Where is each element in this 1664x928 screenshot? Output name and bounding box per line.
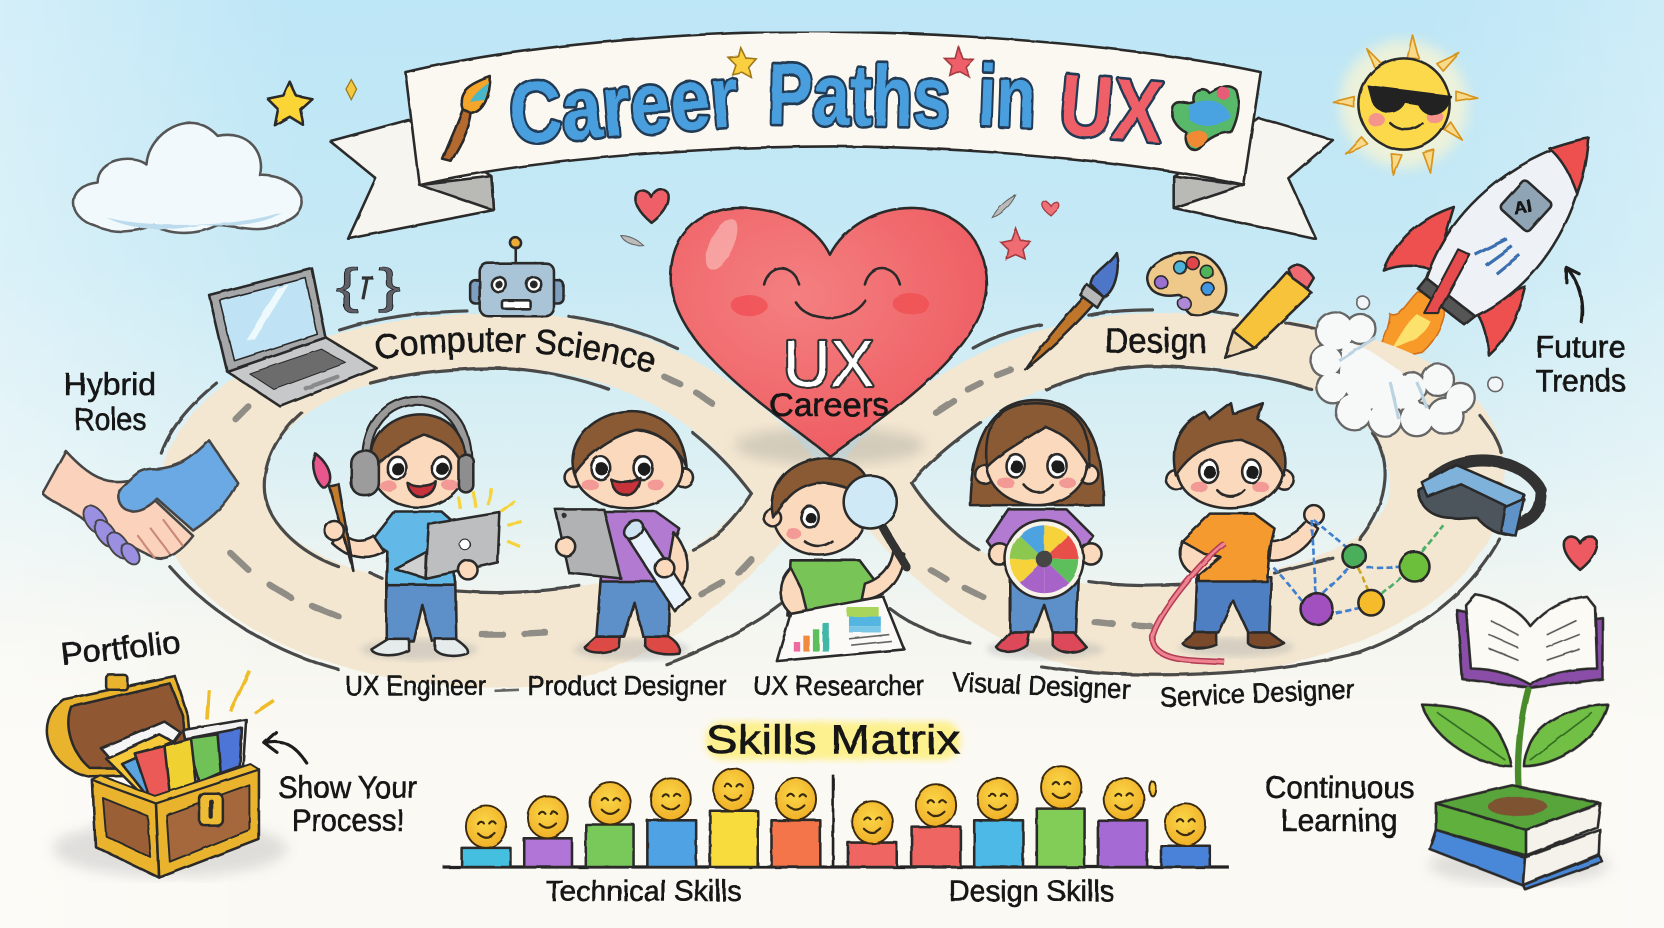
label: Hybrid Roles (64, 366, 156, 437)
label: Continuous Learning: Continuous (1265, 769, 1415, 805)
rocket with AI chip (1375, 138, 1589, 369)
banner left tail (330, 120, 493, 239)
label: Hybrid Roles: Hybrid (64, 366, 156, 402)
title text (506, 46, 1167, 163)
headphones band (366, 401, 468, 472)
icon: treasure chest (47, 671, 287, 878)
career labels (345, 666, 1355, 713)
label: Show Your Process: Process! (292, 802, 404, 838)
title text: UX (1056, 56, 1167, 161)
pink rope (1152, 543, 1225, 662)
label: UX Researcher: UX Researcher (753, 670, 924, 701)
design skill bars (848, 809, 1210, 867)
tablet (555, 509, 621, 578)
paper roll (626, 523, 690, 611)
icon: yellow star (267, 82, 312, 125)
character: UX Engineer (313, 401, 522, 660)
face (773, 470, 866, 555)
heart label Careers: Careers (769, 386, 889, 423)
icon: robot (470, 238, 564, 316)
character: Product Designer (555, 411, 693, 660)
icon: title paintbrush (443, 76, 490, 161)
icon: title puzzle piece (1172, 86, 1239, 150)
title text: Career (506, 48, 742, 163)
icon: book and plant on books (1422, 594, 1610, 889)
plant stem and leaves (1422, 690, 1608, 798)
title text: Paths (767, 46, 951, 146)
character: UX Researcher (764, 458, 906, 661)
banner right tail (1174, 118, 1333, 239)
face (565, 468, 584, 487)
shirt (787, 560, 876, 615)
skills matrix chart (443, 766, 1229, 908)
AI chip (1499, 179, 1553, 233)
face (975, 465, 994, 484)
label: UX Engineer: UX Engineer (345, 670, 486, 701)
icon: pencil (1225, 265, 1314, 358)
light rays (458, 488, 522, 547)
character: Visual Designer (970, 400, 1104, 659)
label: Technical Skills: Technical Skills (545, 875, 742, 908)
rocket body (1418, 138, 1589, 325)
shirt (601, 511, 679, 582)
colour wheel (1005, 520, 1084, 599)
sun rays (1333, 35, 1477, 175)
face (1166, 470, 1185, 489)
label: Product Designer: Product Designer (527, 670, 727, 701)
small decorations around heart (621, 189, 1059, 259)
road: infinity shape (159, 310, 1505, 688)
icon: banner yellow star (728, 48, 757, 77)
label: Service Designer: Service Designer (1159, 673, 1355, 713)
green book (1436, 785, 1600, 855)
label: Computer Science (376, 328, 654, 372)
icon: laptop (209, 268, 377, 406)
ear cups (351, 451, 379, 496)
shirt (1182, 514, 1275, 582)
icon: code braces (335, 259, 401, 313)
label: Design Skills: Design Skills (949, 875, 1114, 908)
icon: palette (1147, 252, 1226, 315)
sunglasses (1367, 85, 1452, 115)
label: Hybrid Roles: Roles (74, 401, 146, 437)
shirt (371, 511, 461, 585)
flame (1375, 292, 1446, 369)
character: Service Designer (1152, 403, 1443, 662)
hair back (970, 400, 1104, 505)
label: Future Trends (1536, 329, 1626, 399)
jeans (386, 582, 456, 641)
icon: VR headset (1418, 461, 1541, 536)
label: Continuous Learning (1265, 769, 1415, 838)
skills matrix heading: Skills Matrix (706, 716, 960, 762)
face (371, 427, 465, 507)
label: Future Trends: Future (1536, 329, 1626, 365)
blue book (1429, 830, 1602, 889)
icon: code braces: { (335, 259, 359, 313)
AI chip: AI (1512, 195, 1533, 218)
label: Visual Designer: Visual Designer (952, 666, 1131, 705)
icon: small star (1001, 228, 1030, 259)
smoke cloud (1311, 312, 1475, 436)
road centre dashes (230, 369, 1150, 635)
laptop (426, 513, 500, 578)
open book (1457, 594, 1602, 688)
paper with chart (777, 596, 904, 661)
banner main ribbon (405, 32, 1261, 185)
rays (207, 671, 274, 719)
icon: tiny heart (1042, 201, 1059, 215)
chest box (92, 764, 259, 878)
label: Continuous Learning: Learning (1281, 802, 1398, 838)
title banner (330, 32, 1333, 239)
label: Computer Science: Computer Science (376, 328, 654, 372)
icon: small sparkle (346, 80, 357, 100)
sun with sunglasses (1333, 35, 1477, 175)
icon: banner red star (944, 47, 973, 76)
label: Show Your Process: Show Your (278, 769, 417, 805)
chest lid (47, 675, 193, 777)
shirt (987, 509, 1093, 584)
arrow: Future Trends (1566, 267, 1582, 322)
rocket fins (1384, 207, 1525, 355)
cloud (73, 123, 302, 233)
network of nodes (1273, 520, 1443, 615)
brush (329, 484, 353, 571)
icon: small heart (635, 189, 669, 223)
label: Design: Design (1105, 321, 1207, 360)
smoke puffs (1356, 296, 1503, 392)
arrow: show your process (264, 732, 307, 763)
icon: code braces: } (378, 259, 401, 313)
icon: handshake (42, 440, 238, 568)
technical skill bars (462, 811, 820, 867)
shoes (371, 639, 409, 655)
portfolio papers (101, 719, 246, 801)
label: Future Trends: Trends (1536, 363, 1626, 399)
heart face (764, 268, 900, 318)
heart mascot: UX Careers (671, 208, 987, 465)
magnifier (883, 527, 906, 567)
smiley faces (466, 766, 1206, 848)
road edges (161, 310, 1502, 675)
label: Portfolio: Portfolio (59, 624, 182, 672)
label: Show Your Process (278, 769, 417, 838)
heart label UX: UX (783, 326, 874, 400)
icon: design paintbrush (1025, 253, 1118, 369)
icon: small heart right (1564, 537, 1597, 570)
title text: in (977, 47, 1037, 146)
